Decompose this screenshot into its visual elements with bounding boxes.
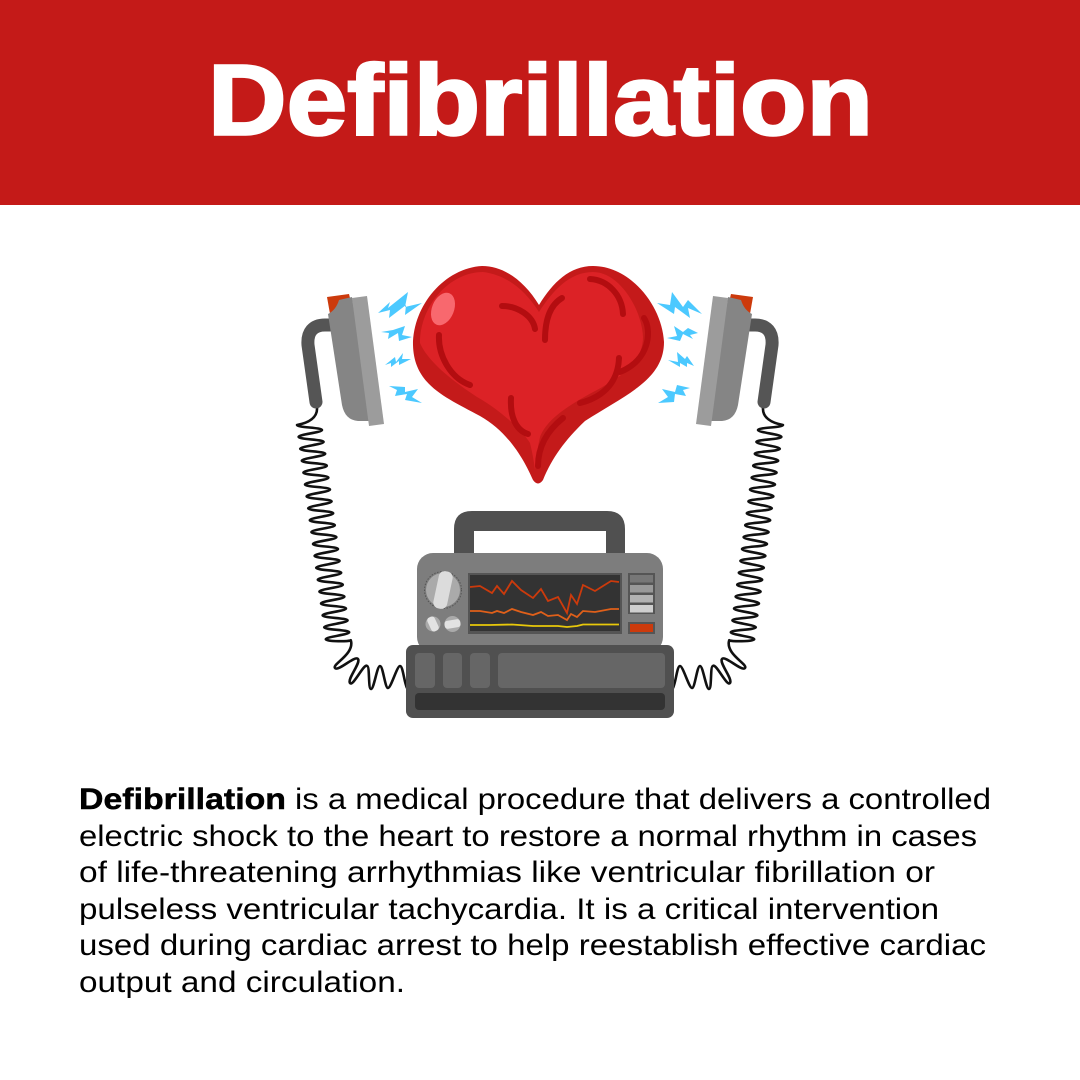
- monitor screen: [468, 573, 622, 634]
- right coiled cord: [673, 407, 783, 689]
- red trace: [470, 581, 619, 613]
- base unit: [406, 645, 674, 718]
- illustration: defibrillator and heart: [297, 266, 783, 718]
- description text: output and circulation.: [79, 966, 405, 999]
- red indicator: [628, 622, 655, 634]
- right electric sparks: [657, 292, 702, 403]
- description text: electric shock to the heart to restore a normal rhythm in cases: [79, 820, 977, 853]
- defibrillator machine: [406, 511, 674, 718]
- description text: Defibrillation: [79, 783, 286, 816]
- left paddle: [308, 294, 384, 426]
- description text: is a medical procedure that delivers a controlled: [295, 783, 991, 816]
- header banner: [0, 0, 1080, 205]
- carry handle: [454, 511, 625, 561]
- left coiled cord: [297, 407, 407, 689]
- title: Defibrillation: [208, 44, 873, 156]
- upper body: [417, 553, 663, 653]
- left electric sparks: [378, 292, 422, 403]
- description text: pulseless ventricular tachycardia. It is a critical intervention: [79, 893, 939, 926]
- heart: [413, 266, 664, 484]
- description text: [79, 783, 991, 999]
- heart highlight: [426, 289, 460, 329]
- indicator buttons: [628, 573, 655, 614]
- right paddle: [696, 294, 772, 426]
- small knobs: [426, 616, 461, 632]
- heart vessels: [439, 279, 648, 466]
- yellow trace: [470, 624, 619, 627]
- description text: of life-threatening arrhythmias like ventricular fibrillation or: [79, 856, 935, 889]
- description text: used during cardiac arrest to help reestablish effective cardiac: [79, 929, 986, 962]
- dial knob: [424, 570, 462, 610]
- orange trace: [470, 609, 619, 620]
